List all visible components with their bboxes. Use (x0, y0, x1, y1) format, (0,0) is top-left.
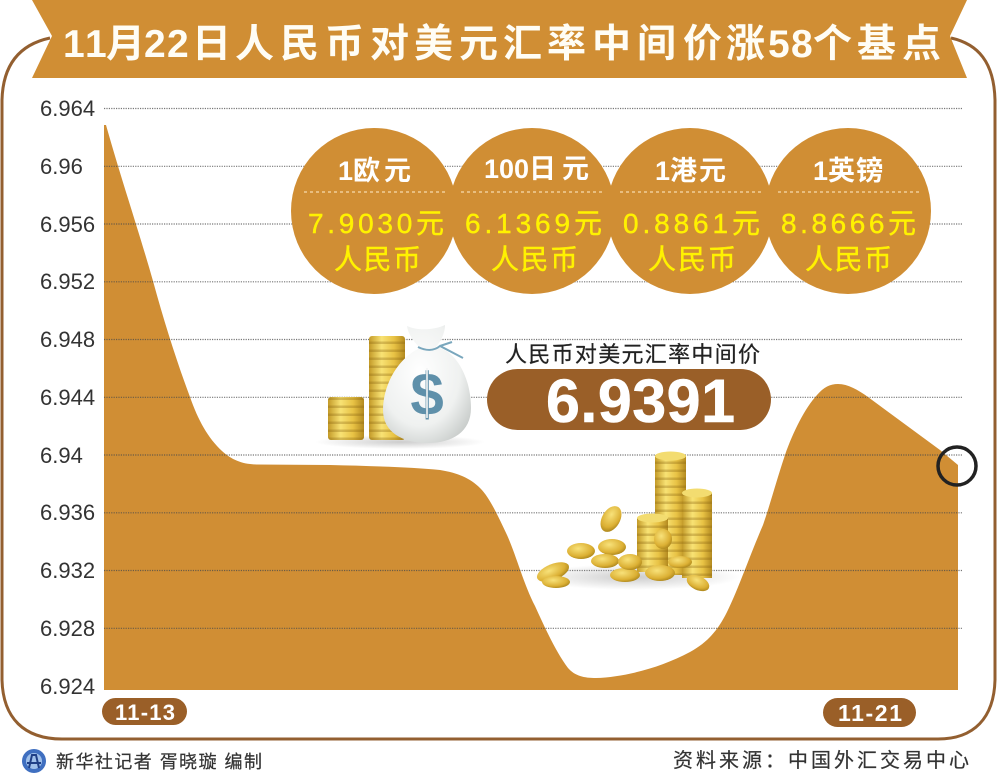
y axis labels: 6.956 (40, 212, 95, 237)
footer source: 资料来源：中国外汇交易中心 (673, 749, 969, 772)
y axis labels: 6.94 (40, 443, 83, 468)
callout: central parity rate (487, 342, 771, 435)
rate circle: euro: 1欧元 (338, 156, 411, 186)
rate circle: yen: 6.1369元 (465, 208, 602, 239)
area chart: exchange rate (40, 96, 976, 699)
rate circle: euro: 人民币 (334, 244, 421, 275)
footer credit with logo: 新华社记者 胥晓璇 编制 (56, 752, 262, 772)
icon: money bag and coin stacks (315, 325, 485, 449)
rate circle: yen: 人民币 (491, 244, 578, 275)
icon: gold coin pile (530, 452, 740, 594)
date tag: 11-21: 11-21 (838, 700, 902, 726)
title: 11月22日人民币对美元汇率中间价涨58个基点 (63, 23, 941, 66)
y axis labels: 6.944 (40, 385, 95, 410)
y axis labels: 6.948 (40, 327, 95, 352)
date tag: 11-13 (102, 698, 187, 725)
title banner (32, 0, 967, 78)
rate circle: euro (291, 128, 457, 294)
y axis labels: 6.928 (40, 616, 95, 641)
rate circle: pound (765, 128, 931, 294)
rate circle: pound: 8.8666元 (781, 208, 916, 239)
rate circle: hong kong dollar: 0.8861元 (623, 208, 760, 239)
rate circle: hong kong dollar (607, 128, 773, 294)
rate circle: yen (449, 128, 615, 294)
rate circle: pound: 人民币 (805, 244, 892, 275)
panel: other currency rates (291, 128, 931, 294)
gridlines (104, 108, 962, 628)
y axis labels (40, 96, 95, 699)
rate circle: pound: 1英镑 (813, 156, 883, 186)
end point marker (938, 447, 976, 485)
y axis labels: 6.936 (40, 500, 95, 525)
callout: central parity rate: 6.9391 (546, 367, 735, 435)
y axis labels: 6.952 (40, 269, 95, 294)
rate circle: yen: 100日元 (484, 154, 589, 184)
callout value (487, 369, 771, 430)
rate circle: hong kong dollar: 人民币 (648, 244, 736, 275)
y axis labels: 6.924 (40, 674, 95, 699)
rate circle: euro: 7.9030元 (308, 208, 444, 239)
y axis labels: 6.96 (40, 154, 83, 179)
date tag: 11-13: 11-13 (115, 700, 175, 725)
icon: money bag and coin stacks: $ (410, 361, 444, 428)
y axis labels: 6.964 (40, 96, 95, 121)
callout label: 人民币对美元汇率中间价 (505, 342, 760, 367)
y axis labels: 6.932 (40, 558, 95, 583)
icon: xinhua logo (22, 749, 46, 773)
date tag: 11-21 (823, 698, 916, 727)
area series (104, 125, 958, 690)
rate circle: hong kong dollar: 1港元 (655, 156, 726, 186)
